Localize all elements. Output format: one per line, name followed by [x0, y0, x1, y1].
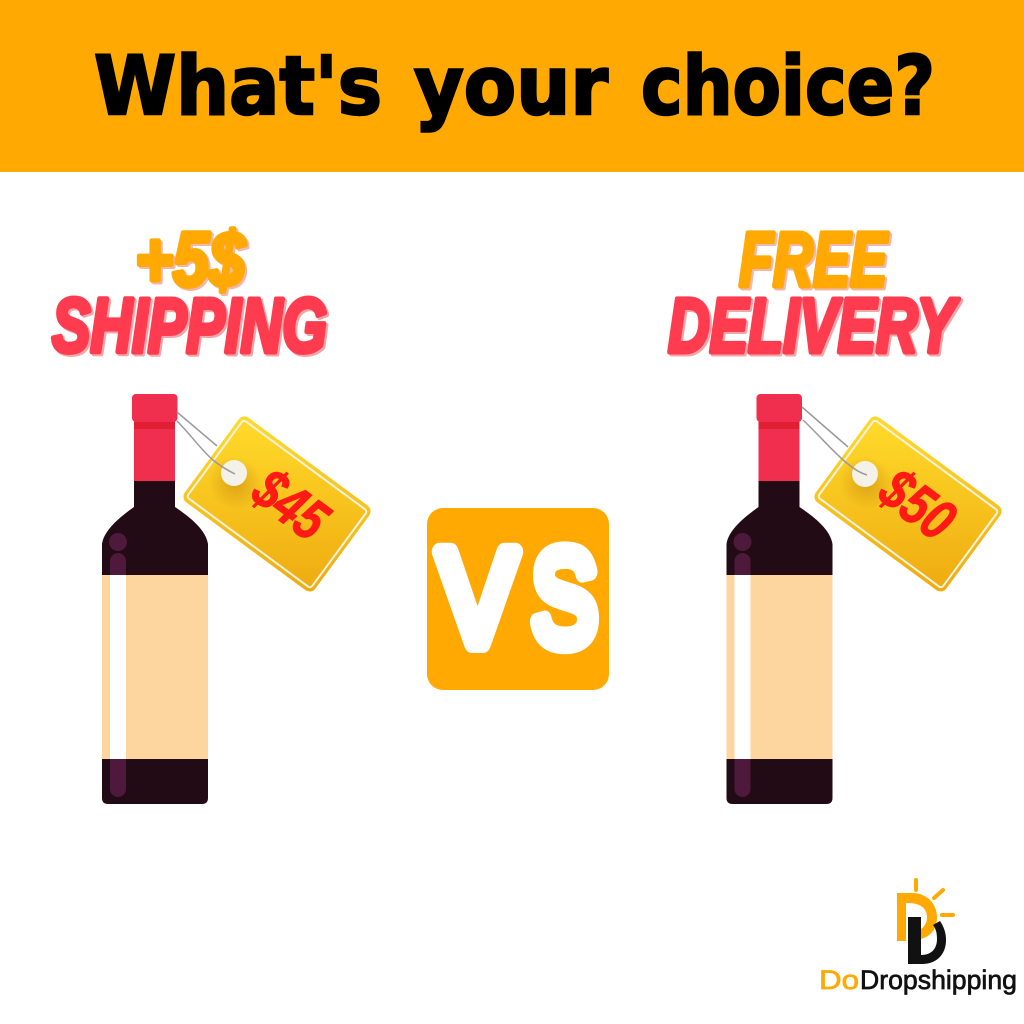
left wine bottle: [102, 394, 208, 804]
heading: +5$ shipping: +5$: [135, 217, 246, 303]
logo mark: [897, 880, 953, 964]
heading: +5$ shipping: +5$: [137, 219, 248, 305]
left price tag: [177, 412, 373, 594]
right price tag: [802, 407, 1004, 594]
heading: free delivery: FREE: [741, 219, 891, 305]
VS badge: V: [439, 524, 516, 673]
heading: +5$ shipping: SHIPPING: [52, 283, 327, 369]
heading: free delivery: [668, 217, 962, 371]
title: [94, 40, 935, 134]
price: $50: $50: [867, 455, 967, 553]
price: $45: $45: [240, 455, 341, 554]
heading: +5$ shipping: SHIPPING: [54, 285, 329, 371]
title: What's: [94, 40, 382, 134]
VS badge: [427, 508, 609, 690]
logo wordmark: Dropshipping: [860, 965, 1017, 995]
title: choice?: [641, 40, 935, 134]
VS badge: S: [532, 524, 597, 673]
logo wordmark: Do: [819, 965, 859, 995]
title: your: [414, 40, 608, 134]
heading: free delivery: FREE: [739, 217, 889, 303]
logo: DoDropshipping: [819, 880, 1017, 995]
title banner: [0, 0, 1024, 172]
right wine bottle: [726, 394, 832, 804]
heading: +5$ shipping: [52, 217, 329, 371]
